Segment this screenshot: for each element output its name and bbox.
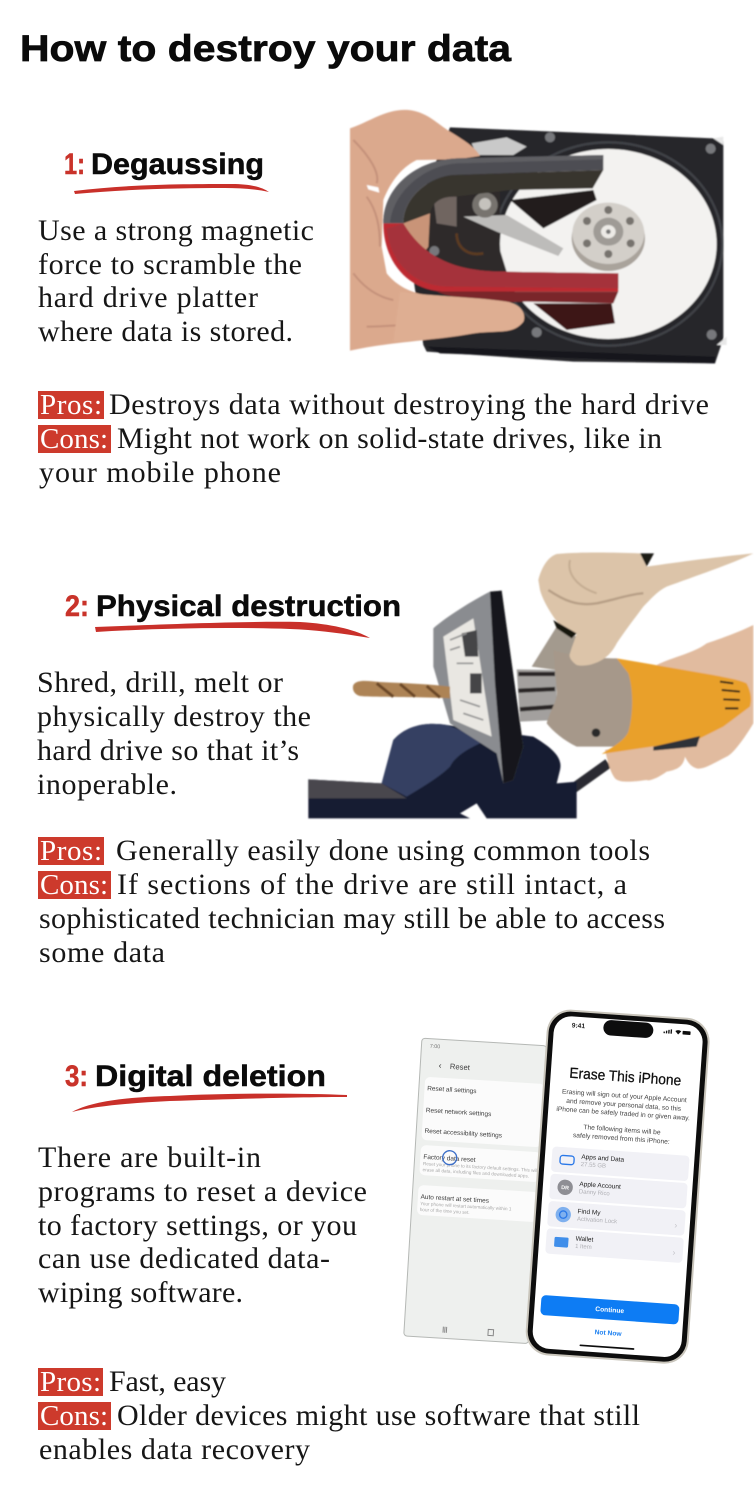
heading: digital deletion: 3:: [65, 1060, 88, 1093]
magnet: [383, 155, 603, 223]
thumb over: [393, 292, 524, 342]
text block: physical destruction description: physically destroy the: [37, 700, 311, 733]
underline: physical destruction: [95, 622, 370, 638]
android phone: Reset accessibility settings: [424, 1128, 503, 1140]
android phone: Auto restart at set times: [420, 1194, 490, 1205]
panel: digital deletion: [38, 1008, 711, 1466]
iphone: ›: [674, 1220, 678, 1230]
iphone: Wallet: [575, 1236, 594, 1244]
pros and cons: physical destruction: [38, 834, 665, 969]
text block: physical destruction description: [37, 666, 311, 801]
pros and cons: digital deletion: Pros:: [40, 1366, 101, 1398]
pros and cons: physical destruction: Generally easily done using common tools: [116, 834, 650, 867]
pros and cons: degaussing: Cons:: [40, 423, 108, 455]
iphone: and remove your personal data, so this: [566, 1098, 682, 1113]
text block: degaussing description: [38, 214, 314, 348]
iphone: ›: [672, 1247, 676, 1258]
text block: digital deletion description: [38, 1141, 367, 1309]
heading: degaussing: 1:: [64, 148, 85, 181]
drill bit: [353, 681, 450, 698]
text block: physical destruction description: inoperable.: [37, 768, 177, 801]
underline: digital deletion: [72, 1094, 347, 1112]
text block: digital deletion description: to factory settings, or you: [38, 1209, 357, 1242]
pros and cons: physical destruction: Cons:: [40, 869, 108, 901]
text block: digital deletion description: There are built-in: [38, 1141, 261, 1174]
iphone: 9:41: [572, 1022, 586, 1030]
android phone: Reset network settings: [426, 1107, 492, 1118]
text block: digital deletion description: can use dedicated data-: [38, 1242, 330, 1275]
hand: [350, 110, 524, 351]
iphone: 1 Item: [575, 1244, 592, 1251]
android phone: Reset all settings: [427, 1085, 477, 1095]
pros and cons: digital deletion: [38, 1365, 640, 1466]
iphone: safely removed from this iPhone:: [573, 1132, 670, 1146]
android phone: Reset your phone to its factory default settings. This will: [423, 1161, 538, 1173]
text block: degaussing description: Use a strong magnetic: [38, 214, 314, 247]
text block: degaussing description: where data is stored.: [38, 315, 293, 348]
illustration: drill through hard drive: [308, 553, 753, 818]
android phone: hour of the time you set.: [420, 1207, 470, 1215]
iphone: Erase This iPhone: [569, 1066, 682, 1089]
iphone: iPhone can be safely traded in or given away.: [556, 1106, 690, 1122]
text block: digital deletion description: wiping software.: [38, 1276, 243, 1309]
iphone: The following items will be: [583, 1124, 661, 1137]
iphone: 27.55 GB: [581, 1162, 606, 1170]
actuator arm: [463, 215, 563, 256]
text block: physical destruction description: Shred, drill, melt or: [37, 666, 283, 699]
text block: physical destruction description: hard drive so that it’s: [37, 734, 299, 767]
android phone: Factory data reset: [423, 1154, 476, 1164]
pros and cons: degaussing: Destroys data without destroying the hard drive: [109, 388, 709, 421]
handle: [570, 763, 608, 791]
iphone: Find My: [577, 1208, 601, 1217]
drill body: [547, 650, 633, 747]
chuck: [517, 669, 557, 722]
android phone: ‹: [438, 1060, 442, 1070]
heading: digital deletion: Digital deletion: [95, 1060, 326, 1093]
android phone: Your phone will restart automatically within 1: [420, 1201, 512, 1212]
pros and cons: physical destruction: sophisticated technician may still be able to access: [39, 902, 665, 935]
glove: [538, 553, 753, 666]
pros and cons: digital deletion: Cons:: [40, 1400, 108, 1432]
text block: degaussing description: force to scramble the: [38, 248, 302, 281]
hub: [572, 206, 645, 271]
lower hand: [605, 625, 753, 782]
android phone: Reset: [450, 1062, 471, 1072]
panel: physical destruction: [37, 553, 753, 969]
iphone: Danny Rico: [579, 1189, 611, 1198]
vise: [308, 724, 577, 818]
android phone: 7:00: [430, 1044, 440, 1050]
illustration: phones with reset screens: [404, 1008, 711, 1365]
heading: degaussing: Degaussing: [91, 148, 264, 181]
iphone: [524, 1008, 711, 1365]
screws: [429, 132, 717, 340]
pros and cons: digital deletion: Fast, easy: [109, 1365, 226, 1398]
android phone: erase all data, including files and downloaded apps.: [422, 1167, 529, 1179]
pros and cons: physical destruction: Pros:: [40, 835, 102, 867]
panel: degaussing: [38, 110, 727, 489]
iphone: DR: [561, 1185, 569, 1192]
iphone: Erasing will sign out of your Apple Account: [562, 1089, 687, 1104]
title: How to destroy your data: [20, 28, 511, 69]
pros and cons: degaussing: Might not work on solid-state drives, like in: [117, 422, 662, 455]
text block: degaussing description: hard drive platter: [38, 281, 258, 314]
pros and cons: physical destruction: some data: [39, 936, 165, 969]
heading: physical destruction: 2:: [65, 590, 89, 623]
illustration: magnet on hard drive: [350, 110, 727, 363]
pros and cons: degaussing: your mobile phone: [39, 456, 281, 489]
pros and cons: digital deletion: enables data recovery: [39, 1433, 310, 1466]
pros and cons: physical destruction: If sections of the drive are still intact, a: [117, 868, 627, 901]
pros and cons: digital deletion: Older devices might use software that still: [117, 1399, 640, 1432]
hard drive: [433, 591, 523, 783]
android phone: [404, 1038, 547, 1344]
iphone: Not Now: [594, 1329, 623, 1338]
pros and cons: degaussing: Pros:: [40, 389, 102, 421]
iphone: Activation Lock: [577, 1217, 617, 1225]
iphone: Apple Account: [579, 1181, 621, 1191]
iphone: Continue: [595, 1306, 625, 1315]
iphone: Apps and Data: [581, 1154, 625, 1164]
pros and cons: degaussing: [38, 388, 709, 489]
heading: physical destruction: Physical destruction: [96, 590, 401, 623]
gray tool handle: [532, 627, 577, 670]
underline: degaussing: [74, 184, 269, 194]
text block: digital deletion description: programs to reset a device: [38, 1175, 367, 1208]
